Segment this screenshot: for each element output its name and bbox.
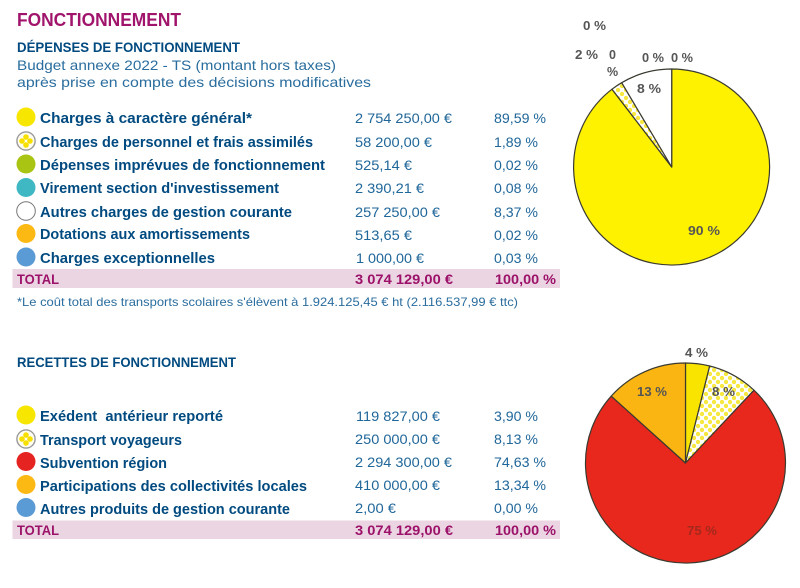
row: total dépenses — [12, 269, 560, 288]
row: transport voyageurs: Transport voyageurs — [40, 433, 182, 449]
row: dépenses imprévues — [16, 154, 538, 174]
row: total recettes: 3 074 129,00 € — [355, 522, 453, 538]
row: autres charges de gestion courante: Autres charges de gestion courante — [40, 205, 292, 221]
row: dépenses imprévues: 0,02 % — [494, 157, 538, 173]
row: total recettes — [12, 520, 560, 539]
row: dotations aux amortissements: 0,02 % — [494, 227, 538, 243]
row: participations des collectivités locales: 410 000,00 € — [355, 477, 440, 493]
row: total dépenses: 3 074 129,00 € — [355, 271, 453, 287]
row: participations des collectivités locales: Participations des collectivités locales — [40, 479, 307, 495]
title: FONCTIONNEMENT — [17, 10, 181, 30]
row: total recettes: TOTAL — [17, 522, 59, 538]
row: autres produits de gestion courante: 2,00 € — [355, 500, 396, 516]
row: dépenses imprévues: 525,14 € — [355, 157, 412, 173]
row: dotations aux amortissements: Dotations aux amortissements — [40, 227, 250, 243]
row: subvention région: Subvention région — [40, 456, 167, 472]
row: charges à caractère général: 2 754 250,00 € — [355, 110, 452, 126]
row: total dépenses: TOTAL — [17, 271, 59, 287]
row: virement section d'investissement: 2 390,21 € — [355, 180, 424, 196]
table: dépenses de fonctionnement — [12, 108, 560, 288]
row: charges exceptionnelles — [16, 248, 538, 267]
section heading: dépenses: DÉPENSES DE FONCTIONNEMENT — [17, 39, 240, 55]
row: transport voyageurs: 8,13 % — [494, 431, 538, 447]
row: excédent antérieur reporté: 119 827,00 € — [356, 408, 440, 424]
pie chart: recettes: 75 % — [687, 524, 717, 538]
pie chart: dépenses: 0 % — [583, 19, 606, 33]
row: autres charges de gestion courante — [17, 202, 538, 221]
row: autres produits de gestion courante: Autres produits de gestion courante — [40, 502, 290, 518]
pie chart: recettes: 13 % — [637, 385, 667, 399]
row: autres produits de gestion courante: 0,00 % — [494, 500, 538, 516]
row: transport voyageurs: 250 000,00 € — [355, 431, 440, 447]
pie chart: recettes — [585, 346, 785, 563]
row: charges exceptionnelles: 1 000,00 € — [356, 250, 424, 266]
pie chart: dépenses: 90 % — [688, 224, 720, 238]
row: total recettes: 100,00 % — [495, 522, 557, 538]
row: charges à caractère général — [16, 108, 546, 127]
section heading: dépenses — [17, 39, 371, 90]
row: subvention région — [16, 452, 546, 472]
pie chart: recettes: 8 % — [712, 385, 735, 399]
section heading: dépenses: après prise en compte des décisions modificatives — [17, 74, 371, 90]
row: excédent antérieur reporté — [16, 406, 538, 425]
row: transport voyageurs — [17, 430, 538, 449]
row: subvention région: 2 294 300,00 € — [355, 454, 452, 470]
row: charges exceptionnelles: 0,03 % — [494, 250, 538, 266]
row: virement section d'investissement — [16, 178, 538, 197]
section heading: dépenses: Budget annexe 2022 - TS (montant hors taxes) — [17, 57, 336, 73]
row: dotations aux amortissements: 513,65 € — [355, 227, 412, 243]
row: dotations aux amortissements — [16, 224, 538, 243]
row: charges de personnel: 58 200,00 € — [355, 134, 432, 150]
row: subvention région: 74,63 % — [494, 454, 546, 470]
pie chart: dépenses: 0 — [609, 48, 616, 62]
row: charges de personnel: Charges de personnel et frais assimilés — [40, 135, 313, 151]
section heading: recettes: RECETTES DE FONCTIONNEMENT — [17, 354, 236, 370]
row: excédent antérieur reporté: Exédent antérieur reporté — [40, 409, 223, 425]
row: virement section d'investissement: Virement section d'investissement — [40, 181, 279, 197]
table: recettes de fonctionnement — [12, 406, 560, 539]
row: total dépenses: 100,00 % — [495, 271, 557, 287]
pie chart: dépenses: 8 % — [637, 82, 661, 96]
row: charges de personnel: 1,89 % — [494, 134, 538, 150]
pie chart: dépenses: 2 % — [575, 48, 598, 62]
pie chart: dépenses: % — [607, 65, 618, 79]
row: participations des collectivités locales: 13,34 % — [494, 477, 546, 493]
pie chart: recettes: 4 % — [685, 346, 708, 360]
row: charges à caractère général: 89,59 % — [494, 110, 546, 126]
pie chart: dépenses — [574, 19, 770, 265]
row: virement section d'investissement: 0,08 % — [494, 180, 538, 196]
row: autres produits de gestion courante — [16, 498, 538, 518]
row: charges à caractère général: Charges à caractère général* — [40, 111, 252, 127]
row: autres charges de gestion courante: 8,37 % — [494, 204, 538, 220]
row: charges exceptionnelles: Charges exceptionnelles — [40, 251, 215, 267]
pie chart: dépenses: 0 % — [671, 51, 693, 65]
row: charges de personnel — [17, 132, 538, 151]
row: participations des collectivités locales — [16, 475, 546, 495]
row: dépenses imprévues: Dépenses imprévues de fonctionnement — [40, 158, 325, 174]
row: autres charges de gestion courante: 257 250,00 € — [355, 204, 440, 220]
row: excédent antérieur reporté: 3,90 % — [494, 408, 538, 424]
footnote: *Le coût total des transports scolaires s'élèvent à 1.924.125,45 € ht (2.116.537,99 € ttc) — [17, 295, 518, 309]
pie chart: dépenses: 0 % — [642, 51, 664, 65]
